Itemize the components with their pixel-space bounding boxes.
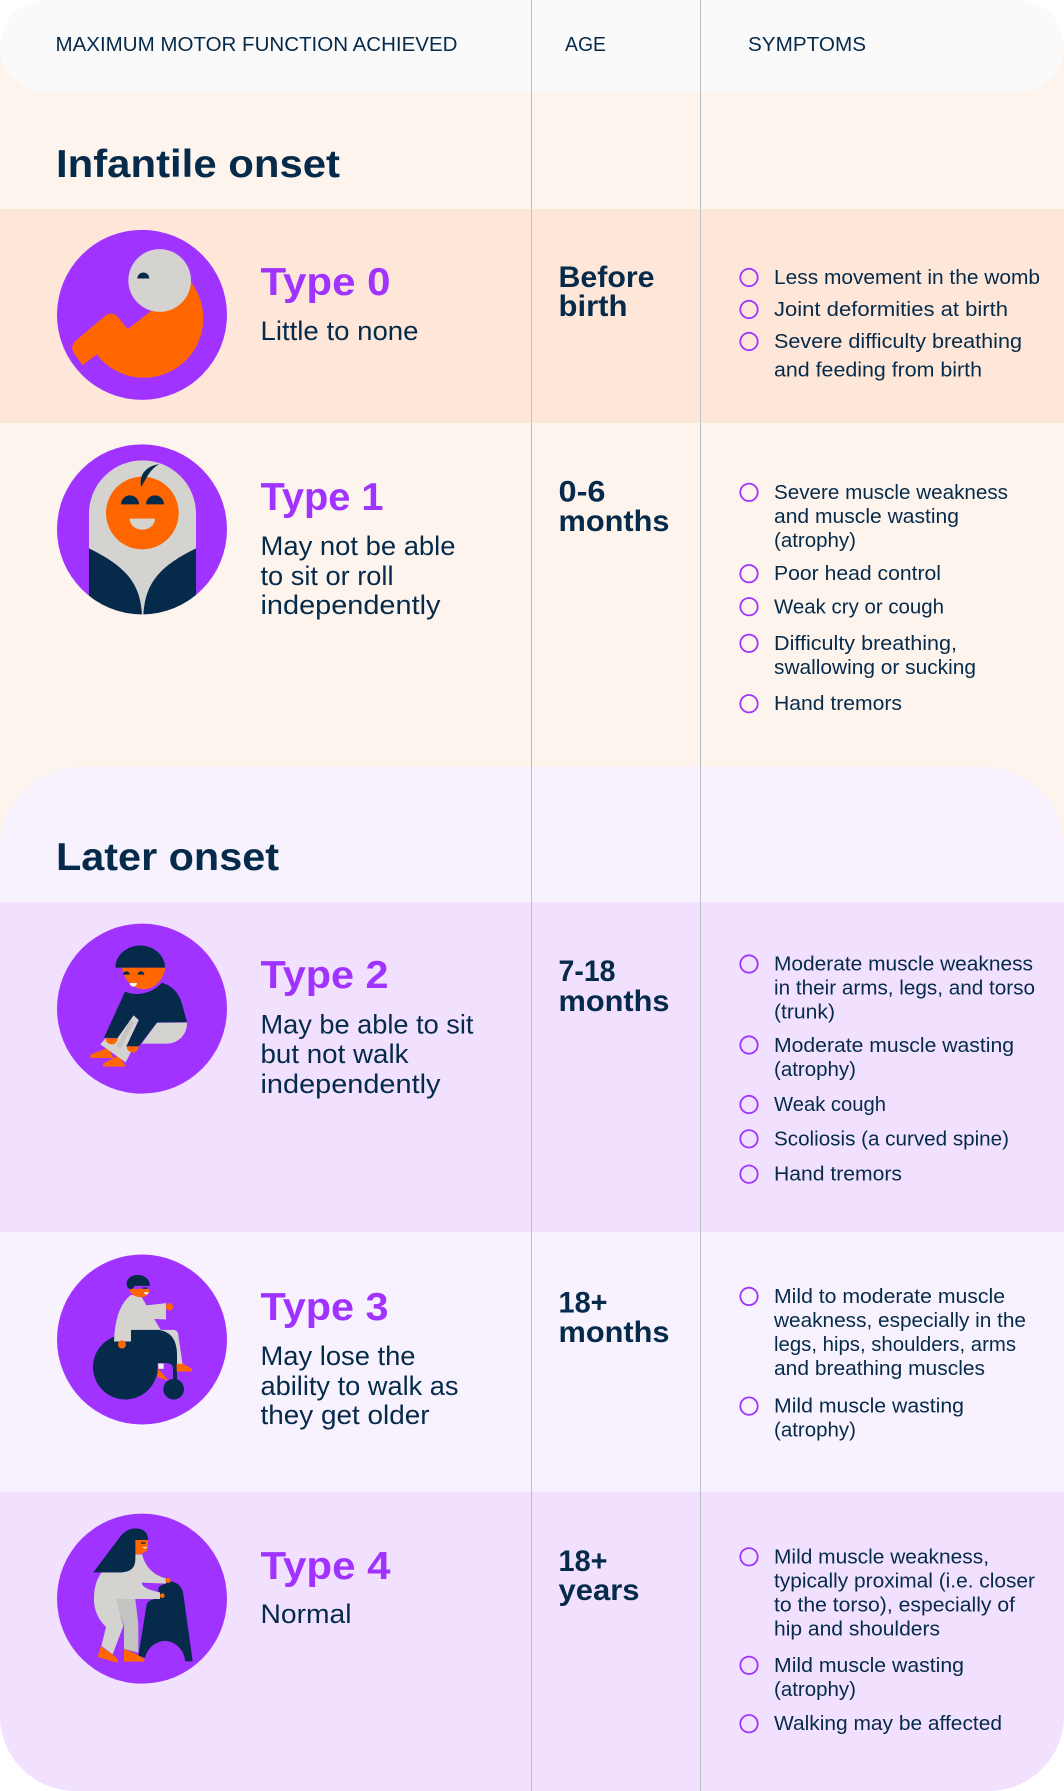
- type 3 symptoms: legs, hips, shoulders, arms: [774, 1333, 1016, 1356]
- type 1 symptoms: Hand tremors: [774, 692, 902, 715]
- type 2 symptoms: [740, 952, 1035, 1186]
- icon: type 3 wheelchair: [57, 1254, 227, 1424]
- type 3 age: 18+: [558, 1286, 608, 1320]
- header labels: SYMPTOMS: [748, 33, 866, 56]
- type 1 symptoms: Severe muscle weakness: [774, 481, 1008, 504]
- header labels: AGE: [565, 33, 606, 56]
- type 1 symptoms: (atrophy): [774, 529, 856, 552]
- type 0 age: Before: [558, 261, 654, 294]
- type 3 label: ability to walk as: [260, 1371, 458, 1401]
- type 2 age: [558, 955, 670, 1018]
- type 3 age: [558, 1286, 670, 1349]
- header labels: [56, 33, 866, 56]
- type 1 age: months: [558, 505, 670, 538]
- type 4 symptoms: typically proximal (i.e. closer: [774, 1569, 1035, 1592]
- type 0 label: [260, 261, 418, 346]
- type 3 label: May lose the: [260, 1341, 416, 1371]
- type 4 age: years: [558, 1574, 640, 1607]
- type 1 age: [558, 476, 670, 538]
- type 1 symptoms: and muscle wasting: [774, 505, 959, 528]
- type 3 age: months: [558, 1316, 670, 1349]
- type 1 label: Type 1: [260, 476, 384, 519]
- type 4 label: [260, 1545, 391, 1629]
- icon: type 4 woman with walker: [57, 1514, 227, 1684]
- type 4 label: Normal: [260, 1599, 352, 1629]
- type 3 label: [260, 1286, 458, 1430]
- type 2 symptoms: Moderate muscle wasting: [774, 1034, 1014, 1057]
- type 2 symptoms: Scoliosis (a curved spine): [774, 1127, 1009, 1150]
- type 3 symptoms: Mild muscle wasting: [774, 1395, 964, 1418]
- panel: table header band: [0, 0, 1064, 92]
- type 1 label: May not be able: [260, 531, 456, 561]
- type 0 symptoms: and feeding from birth: [774, 359, 982, 382]
- type 2 label: Type 2: [260, 954, 388, 997]
- type 0 label: Little to none: [260, 316, 418, 346]
- panel: infantile onset background: [0, 40, 1064, 860]
- type 2 symptoms: (atrophy): [774, 1058, 856, 1081]
- type 1 label: independently: [260, 590, 441, 620]
- type 2 symptoms: Weak cough: [774, 1093, 886, 1116]
- type 2 label: May be able to sit: [260, 1010, 474, 1040]
- type 1 symptoms: Weak cry or cough: [774, 595, 944, 618]
- type 2 symptoms: Hand tremors: [774, 1163, 902, 1186]
- type 3 symptoms: weakness, especially in the: [773, 1309, 1026, 1332]
- type 4 symptoms: to the torso), especially of: [774, 1593, 1015, 1616]
- type 0 symptoms: Severe difficulty breathing: [774, 330, 1022, 353]
- type 4 label: Type 4: [260, 1545, 391, 1588]
- type 3 symptoms: (atrophy): [774, 1418, 856, 1442]
- type 2 age: months: [558, 985, 670, 1018]
- type 0 symptoms: Joint deformities at birth: [774, 298, 1008, 321]
- icon: type 1 baby: [57, 444, 227, 616]
- type 1 symptoms: Difficulty breathing,: [774, 632, 957, 655]
- type 4 symptoms: Mild muscle weakness,: [774, 1545, 989, 1568]
- type 4 symptoms: hip and shoulders: [774, 1617, 940, 1640]
- type 2 label: [260, 954, 474, 1099]
- type 3 symptoms: Mild to moderate muscle: [774, 1285, 1005, 1308]
- heading: Infantile onset: Infantile onset: [56, 143, 340, 186]
- type 3 symptoms: [740, 1285, 1026, 1442]
- type 2 label: independently: [260, 1069, 441, 1099]
- type 0 age: birth: [558, 290, 628, 323]
- type 4 symptoms: Walking may be affected: [774, 1712, 1002, 1735]
- type 4 symptoms: Mild muscle wasting: [774, 1654, 964, 1677]
- type 0 symptoms: [740, 266, 1040, 382]
- type 1 symptoms: Poor head control: [774, 562, 941, 585]
- type 2 symptoms: (trunk): [774, 1000, 835, 1024]
- type 1 symptoms: [740, 481, 1008, 715]
- type 2 symptoms: in their arms, legs, and torso: [774, 976, 1035, 1000]
- panel: later onset background: [0, 767, 1064, 1791]
- type 3 label: Type 3: [260, 1286, 388, 1329]
- heading: Later onset: Later onset: [56, 836, 279, 879]
- header labels: MAXIMUM MOTOR FUNCTION ACHIEVED: [56, 33, 458, 56]
- type 0 age: [558, 261, 654, 323]
- type 4 age: [558, 1545, 640, 1607]
- type 4 age: 18+: [558, 1545, 608, 1578]
- type 1 label: [260, 476, 456, 620]
- type 4 symptoms: [740, 1545, 1035, 1735]
- type 3 symptoms: and breathing muscles: [774, 1357, 985, 1380]
- type 2 age: 7-18: [558, 955, 616, 988]
- type 2 symptoms: Moderate muscle weakness: [774, 952, 1033, 976]
- type 3 label: they get older: [260, 1400, 430, 1430]
- icon: type 0 foetus: [57, 230, 227, 400]
- type 0 label: Type 0: [260, 261, 390, 304]
- type 0 symptoms: Less movement in the womb: [774, 266, 1040, 289]
- type 4 symptoms: (atrophy): [774, 1678, 856, 1701]
- type 2 label: but not walk: [260, 1039, 409, 1069]
- type 1 label: to sit or roll: [260, 561, 394, 591]
- type 1 symptoms: swallowing or sucking: [774, 656, 976, 679]
- icon: type 2 sitting child: [57, 924, 227, 1094]
- type 1 age: 0-6: [558, 476, 606, 508]
